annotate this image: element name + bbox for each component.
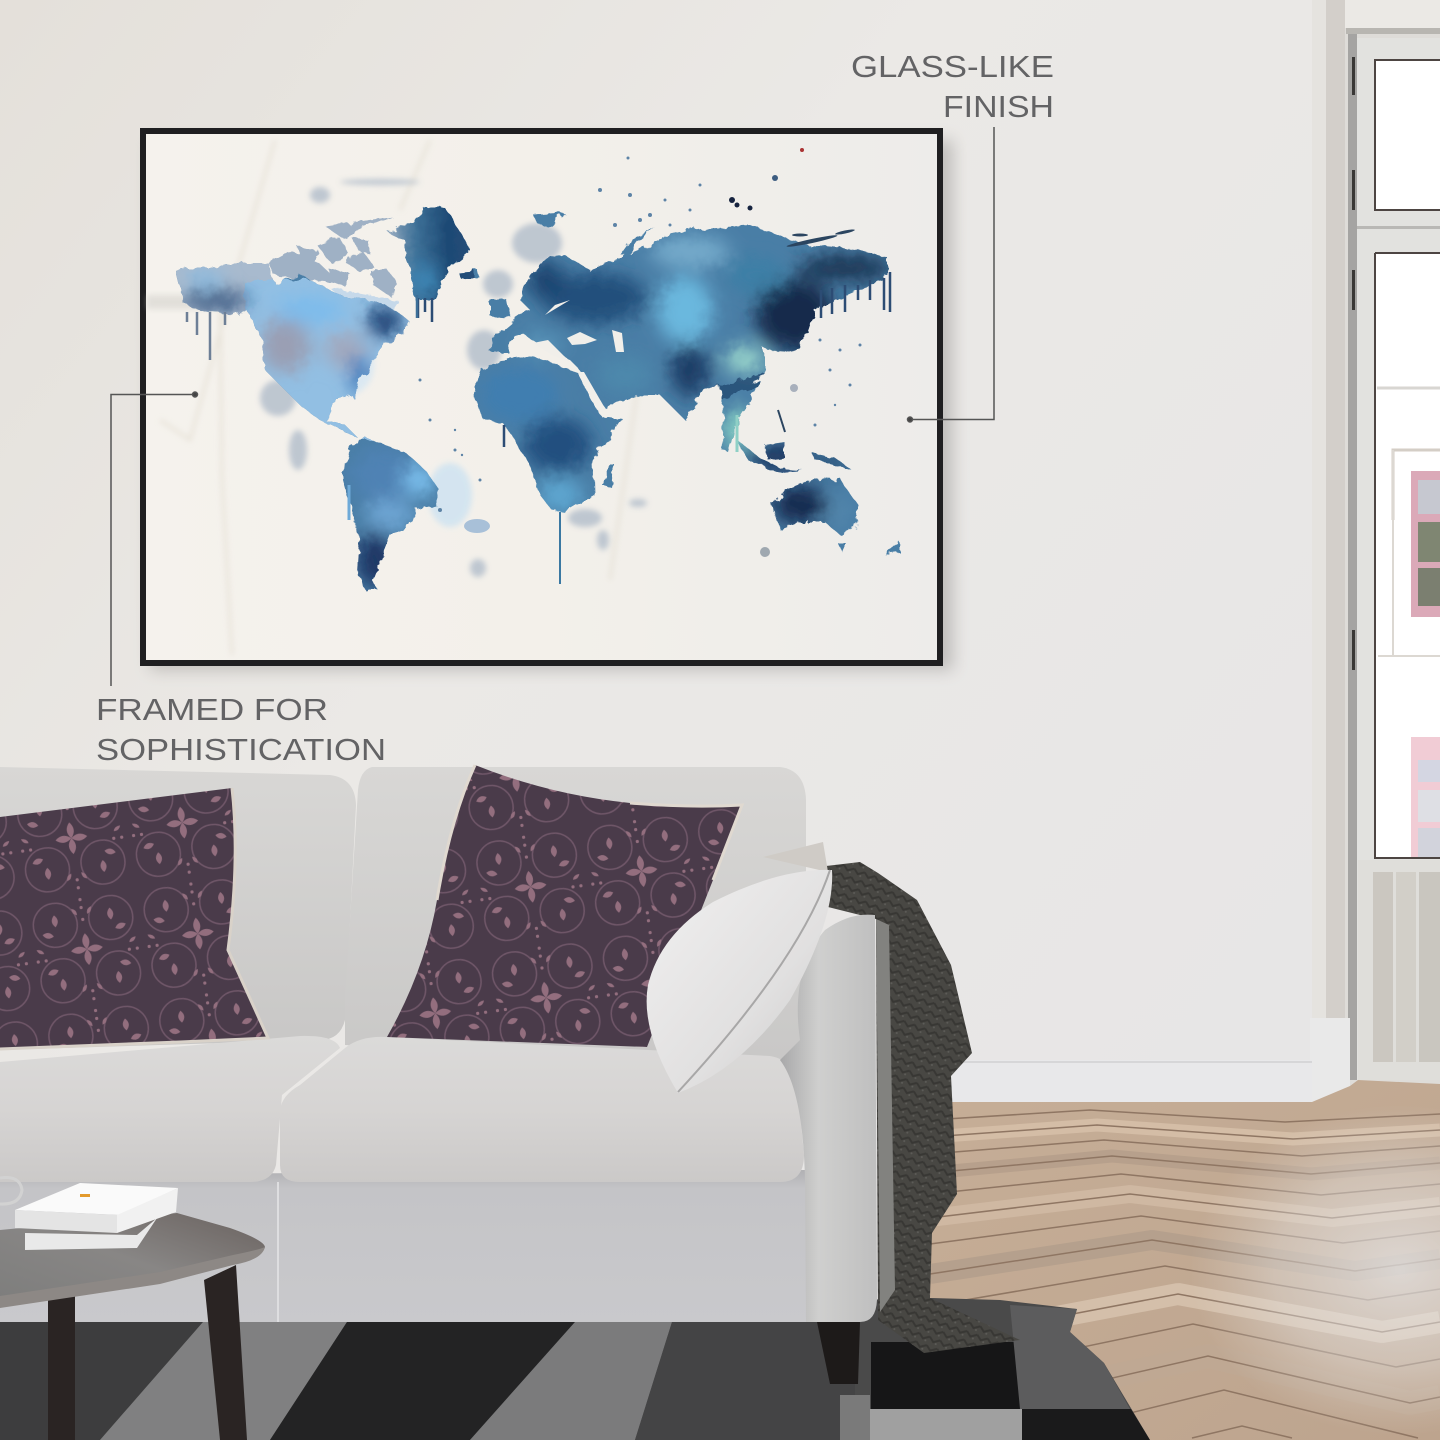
callout: glass-like finish leader: [908, 127, 994, 422]
sofa foot: [817, 1322, 860, 1384]
table top marble: [0, 1213, 265, 1307]
coffee table: [0, 1178, 265, 1440]
callout text: framed for sophistication: SOPHISTICATION: [96, 732, 386, 767]
glass vase: [0, 1178, 22, 1204]
baseboard: [950, 1060, 1312, 1102]
sofa base: [0, 1170, 806, 1322]
callout text: glass-like finish: FINISH: [943, 89, 1054, 124]
callout text: framed for sophistication: FRAMED FOR: [96, 692, 328, 727]
callout text: glass-like finish: [851, 49, 1054, 124]
callout: framed for sophistication leader: [111, 392, 198, 686]
throw blanket: [820, 862, 1020, 1353]
book stack: [15, 1183, 178, 1250]
cushion: white: [647, 842, 832, 1093]
sofa: [0, 767, 860, 1384]
callout text: framed for sophistication: [96, 692, 386, 767]
canvas texture: [160, 140, 640, 655]
sofa seat cushion centre: [280, 1037, 804, 1182]
cushion: left purple: [0, 788, 268, 1049]
window pane: upper: [1375, 60, 1440, 210]
cushion: centre purple: [387, 765, 742, 1047]
sofa back cushion left: [0, 767, 356, 1050]
paint splatter: [418, 148, 862, 557]
rug: [0, 1298, 1150, 1440]
sofa seat cushion left: [0, 1036, 340, 1182]
table leg front: [204, 1265, 247, 1440]
inland seas: [533, 258, 624, 412]
table leg back: [48, 1295, 75, 1440]
canada fragments: [268, 216, 398, 312]
sofa back cushion centre: [345, 767, 806, 1075]
window pane: lower with building outside: [1375, 253, 1440, 858]
grey watercolor washes: [260, 179, 647, 577]
world map watercolor: [170, 200, 900, 600]
glass reflection band: [147, 295, 267, 309]
herringbone floor: [930, 1080, 1440, 1440]
framed artwork: [143, 131, 953, 670]
callout text: glass-like finish: GLASS-LIKE: [851, 49, 1054, 84]
window and door frame: [1310, 0, 1440, 1102]
sofa arm: [780, 915, 877, 1322]
door lower panel: [1358, 860, 1440, 1080]
paint drips: [187, 272, 890, 584]
